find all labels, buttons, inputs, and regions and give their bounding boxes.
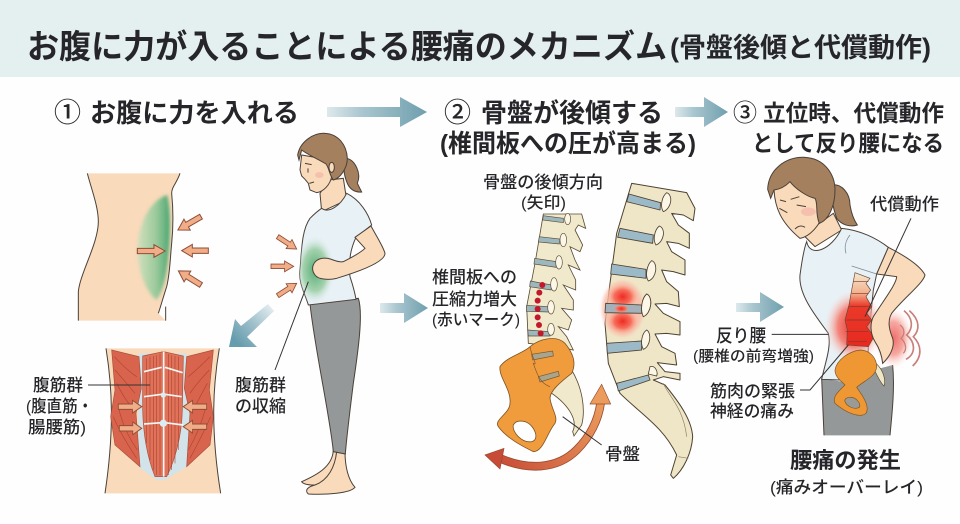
pelvis (497, 339, 574, 452)
step 2 heading (440, 98, 696, 158)
title: お腹に力が入ることによる腰痛のメカニズム (27, 28, 667, 65)
label: abdominal contraction (235, 376, 286, 416)
right rectus abdominis (164, 352, 183, 477)
sacral segments on pelvis (532, 351, 559, 382)
pained expression (779, 197, 806, 229)
panel: woman with lumbar lordosis and low back pain (768, 157, 925, 435)
leggings (310, 298, 360, 454)
ponytail (831, 185, 857, 226)
label: pelvis tilt direction (483, 173, 603, 212)
green contraction area (300, 240, 332, 304)
pelvis leader line (563, 417, 602, 445)
back foot and calf (302, 450, 337, 485)
sacrum (873, 363, 885, 386)
face (774, 173, 823, 238)
step 2 heading: ② (444, 98, 471, 128)
step 1 heading: お腹に力を入れる (90, 98, 299, 128)
shirt (300, 193, 372, 305)
red compression dots (535, 282, 545, 336)
eye and mouth (305, 163, 314, 183)
leader line (275, 282, 308, 370)
pain waves (904, 311, 920, 366)
step 3 heading: ③ (733, 100, 757, 127)
panel: standing woman tensing abdomen (271, 133, 385, 494)
right oblique muscle (184, 350, 213, 467)
step 3 heading (733, 100, 944, 156)
label: compensation: 代償動作 (870, 195, 939, 214)
leader lines (772, 218, 911, 390)
panel: small spine with pelvis (485, 213, 611, 469)
label: lumbar lordosis: (腰椎の前弯増強) (693, 347, 814, 365)
header band (0, 0, 960, 77)
arrow: woman to spine (380, 293, 428, 323)
label: disc compression: 圧縮力増大 (432, 290, 517, 309)
label: abdominal contraction: の収縮 (235, 397, 286, 416)
shirt (800, 228, 888, 380)
title: (骨盤後傾と代償動作) (670, 33, 931, 63)
front foot and calf (307, 452, 355, 494)
ponytail (344, 158, 362, 192)
compressed disc (605, 303, 642, 313)
lumbar discs (526, 216, 563, 336)
left oblique muscle (111, 350, 141, 467)
hair (298, 133, 347, 180)
sacrum seam (663, 383, 688, 458)
small sacrum (547, 370, 583, 436)
contraction arrows (275, 232, 300, 254)
arm and hand (871, 247, 925, 363)
label: abdominal muscles: 腹筋群 (33, 376, 83, 395)
face (300, 155, 332, 193)
panel: enlarged spine with disc pressure (602, 183, 695, 478)
lumbar spine silhouette (527, 214, 586, 350)
curved tilt arrow (500, 403, 601, 466)
label: pelvis tilt direction: (矢印) (521, 193, 566, 212)
label: onset of low back pain: 腰痛の発生 (790, 448, 901, 473)
label: disc compression (432, 268, 520, 329)
step 3 heading: として反り腰になる (752, 130, 944, 156)
panel: abdominal muscle diagram (105, 348, 221, 493)
canal ovals (565, 213, 571, 225)
label: pelvis: 骨盤 (605, 445, 640, 464)
label: lumbar lordosis: 反り腰 (716, 326, 766, 346)
label: muscle tension and nerve pain (710, 382, 795, 421)
leggings (822, 365, 893, 435)
red pressure glow (602, 281, 643, 336)
panel: torso side view with abdominal contraction (78, 173, 208, 321)
pelvis (834, 350, 877, 415)
red lumbar glow (825, 290, 883, 363)
step 2 heading: 骨盤が後傾する (481, 98, 663, 128)
label: onset of low back pain: (痛みオーバーレイ) (770, 478, 923, 497)
label: muscle tension and nerve pain: 神経の痛み (710, 402, 794, 421)
hair (768, 157, 835, 223)
label: abdominal muscles: (腹直筋・ (26, 397, 93, 416)
arrow: woman to muscle diagram (229, 304, 274, 347)
arrow: step 2 to step 3 (675, 97, 728, 127)
label: onset of low back pain (770, 448, 923, 497)
label: muscle tension and nerve pain: 筋肉の緊張 (710, 382, 795, 401)
discs (607, 194, 661, 391)
neck (320, 178, 347, 212)
step 1 heading: ① (54, 98, 81, 128)
label: lumbar lordosis (693, 326, 814, 365)
arrow: spine to posture (736, 292, 784, 322)
step 2 heading: (椎間板への圧が高まる) (440, 129, 696, 158)
left rectus abdominis (143, 352, 163, 477)
label: abdominal muscles (26, 376, 150, 437)
label: disc compression: 椎間板への (432, 268, 517, 287)
canal ovals (642, 193, 671, 376)
label: abdominal contraction: 腹筋群 (235, 376, 286, 395)
neck (803, 213, 842, 247)
step 3 heading: 立位時、代償動作 (763, 100, 944, 126)
arm and fist (313, 226, 385, 279)
label: disc compression: (赤いマーク) (432, 311, 520, 329)
label: pelvis tilt direction: 骨盤の後傾方向 (483, 173, 603, 192)
exposed spine (845, 273, 874, 347)
arrow: step 1 to step 2 (327, 97, 427, 127)
label: abdominal muscles: 腸腰筋) (28, 418, 86, 437)
